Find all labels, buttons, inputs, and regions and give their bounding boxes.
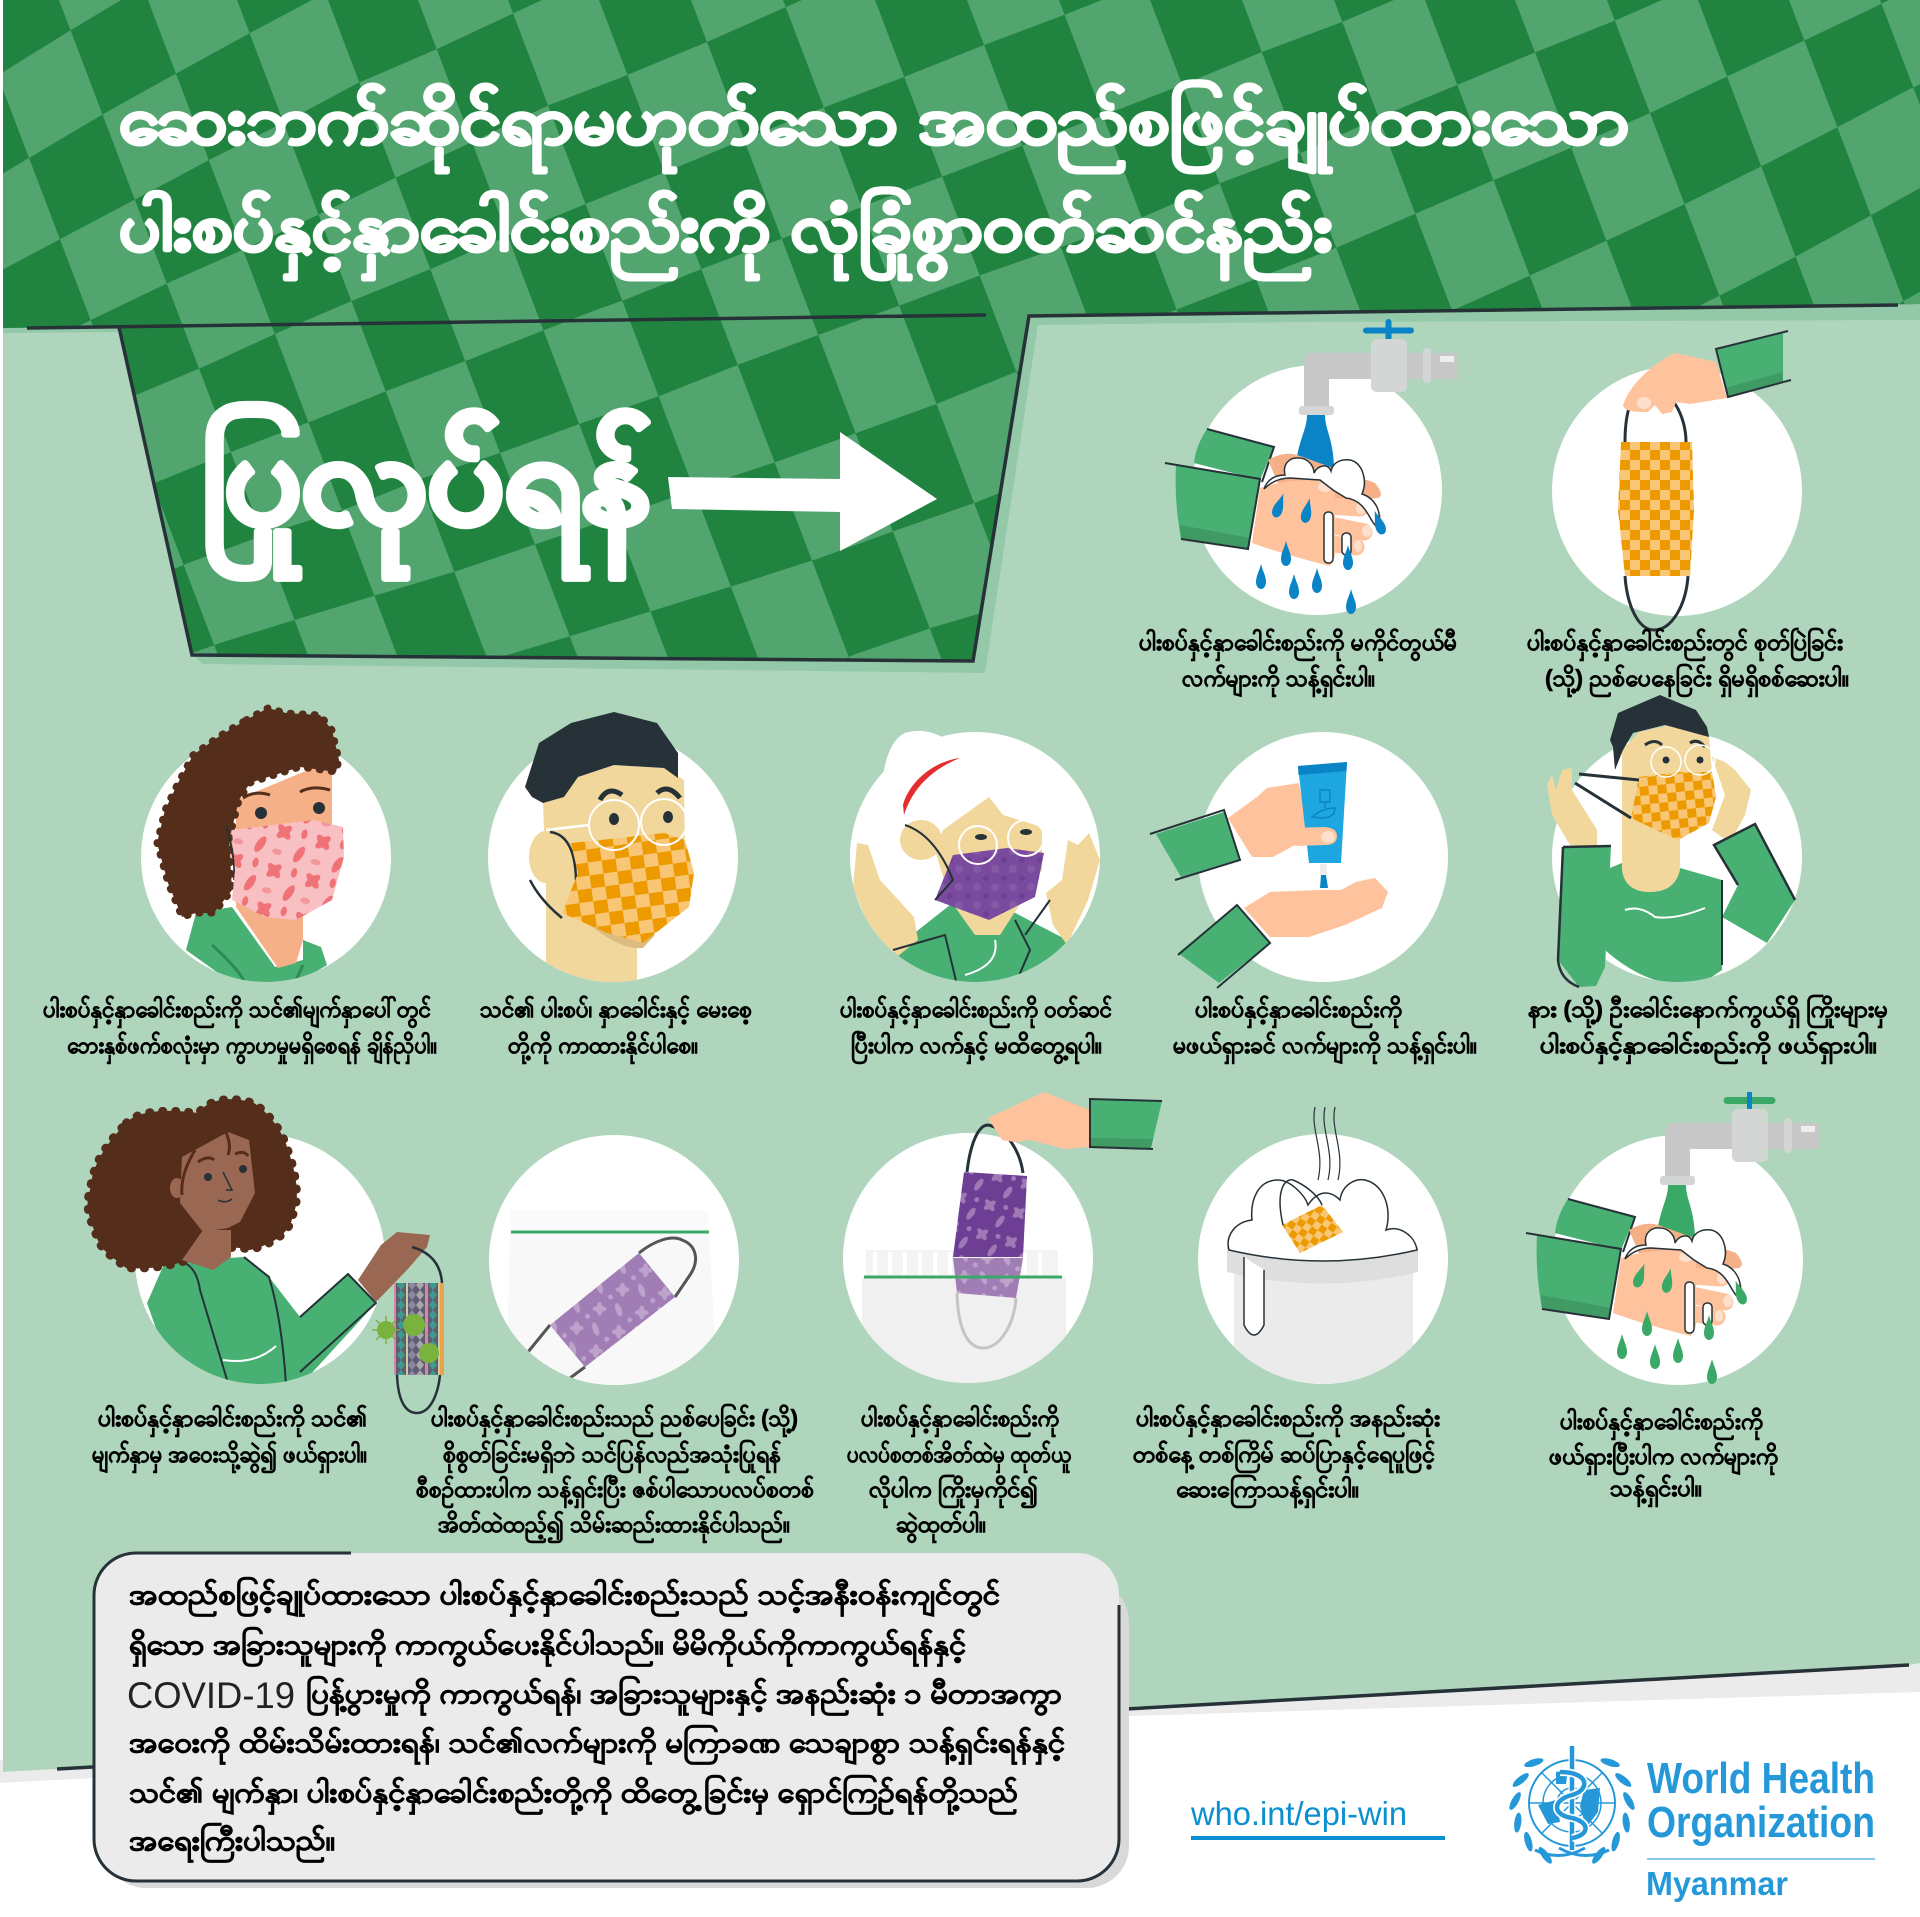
circle xyxy=(1553,1135,1803,1385)
sign heading: do's: ပြုလုပ်ရန် xyxy=(202,403,651,579)
illustration: woman with curly hair xyxy=(88,1099,430,1400)
circle xyxy=(141,732,391,982)
circle xyxy=(843,1133,1093,1383)
icon: viruses xyxy=(372,1314,439,1363)
caption: သန့်ရှင်းပါ။ xyxy=(1610,1475,1702,1507)
panel: wash mask xyxy=(1133,1107,1448,1508)
caption: အိတ်ထဲထည့်၍ သိမ်းဆည်းထားနိုင်ပါသည်။ xyxy=(438,1511,790,1543)
caption: လိုပါက ကြိုးမှကိုင်၍ xyxy=(869,1475,1038,1508)
icon: straps xyxy=(1625,387,1688,630)
caption: ပါးစပ်နှင့်နှာခေါင်းစည်းကို xyxy=(1195,996,1402,1028)
circle xyxy=(1552,732,1802,982)
header and sign outlines xyxy=(27,305,1898,661)
grey wedge below green panel xyxy=(0,1660,1920,1783)
icon: patterned mask xyxy=(394,1283,444,1375)
logo rule xyxy=(1647,1858,1875,1860)
wordmark: Organization xyxy=(1647,1798,1875,1847)
caption: ပလပ်စတစ်အိတ်ထဲမှ ထုတ်ယူ xyxy=(847,1441,1072,1473)
icon: sanitiser tube xyxy=(1298,762,1347,888)
icon: tap handle xyxy=(1727,1097,1772,1104)
caption: ပါးစပ်နှင့်နှာခေါင်းစည်းကို မကိုင်တွယ်မီ xyxy=(1139,629,1457,661)
callout text xyxy=(127,1576,1065,1864)
title xyxy=(119,78,1629,281)
icon: tap stem xyxy=(1747,1092,1752,1110)
bottom divider line xyxy=(57,1665,1909,1769)
caption: ပါးစပ်နှင့်နှာခေါင်းစည်းသည် ညစ်ပေခြင်း (သို့) xyxy=(431,1404,798,1437)
circle xyxy=(1552,366,1802,616)
caption xyxy=(1527,628,1849,697)
caption: စိုစွတ်ခြင်းမရှိဘဲ သင်ပြန်လည်အသုံးပြုရန် xyxy=(443,1440,781,1473)
caption xyxy=(480,996,752,1064)
callout text: သင်၏ မျက်နှာ၊ ပါးစပ်နှင့်နှာခေါင်းစည်းတို့ကို ထိတွေ့ခြင်းမှ ရှောင်ကြဉ်ရန်တို့သည် xyxy=(129,1774,1018,1816)
circle xyxy=(489,1135,739,1385)
box xyxy=(94,1553,1119,1881)
caption: ပါးစပ်နှင့်နှာခေါင်းစည်းကို အနည်းဆုံး xyxy=(1136,1405,1440,1437)
circle xyxy=(850,732,1100,982)
illustration: man xyxy=(525,712,694,990)
caption: စီစဉ်ထားပါက သန့်ရှင်းပြီး ဇစ်ပါသောပလပ်စတစ် xyxy=(416,1475,814,1508)
illustration: woman xyxy=(157,708,344,990)
panel: removing mask by straps xyxy=(1528,695,1888,1064)
caption xyxy=(1549,1408,1778,1507)
panel: take mask from bag xyxy=(843,1092,1162,1543)
illustration: older woman xyxy=(853,731,1100,1000)
icon: hands under running tap xyxy=(1526,1109,1819,1384)
panel: woman in pink mask xyxy=(43,708,437,1064)
callout text: အရေးကြီးပါသည်။ xyxy=(129,1822,335,1864)
circle xyxy=(135,1134,385,1384)
caption xyxy=(43,996,437,1064)
title: ပါးစပ်နှင့်နှာခေါင်းစည်းကို လုံခြုံစွာဝတ်ဆင်နည်း xyxy=(119,185,1332,281)
panel: wash hands after xyxy=(1526,1092,1819,1507)
callout text: COVID-19 xyxy=(127,1675,295,1716)
circle xyxy=(1198,1134,1448,1384)
wordmark: World Health xyxy=(1647,1754,1875,1803)
icon: checked mask xyxy=(1618,442,1694,576)
callout box xyxy=(94,1553,1129,1888)
zip line xyxy=(864,1276,1062,1278)
caption: (သို့) ညစ်ပေနေခြင်း ရှိမရှိစစ်ဆေးပါ။ xyxy=(1545,664,1849,697)
caption xyxy=(1133,1405,1440,1508)
illustration: foam xyxy=(1228,1180,1417,1261)
panel: man in checked mask xyxy=(480,712,752,1064)
illustration: bag xyxy=(862,1250,1066,1397)
icon: hands under running tap xyxy=(1165,339,1458,614)
WHO logo xyxy=(1507,1746,1875,1902)
caption: ဖယ်ရှားပြီးပါက လက်များကို xyxy=(1549,1442,1778,1475)
icon: sleeve xyxy=(1716,331,1791,397)
circle xyxy=(1192,365,1442,615)
callout text: ရှိသော အခြားသူများကို ကာကွယ်ပေးနိုင်ပါသည်။ မိမိကိုယ်ကိုကာကွယ်ရန်နှင့် xyxy=(129,1626,966,1668)
illustration: zip bag with mask xyxy=(508,1230,714,1385)
caption: တို့ကို ကာထားနိုင်ပါစေ။ xyxy=(508,1032,698,1064)
caption: ဘေးနှစ်ဖက်စလုံးမှာ ကွာဟမှုမရှိစေရန် ချိန်ညှိပါ။ xyxy=(67,1032,437,1064)
panel: pull mask away from face xyxy=(88,1099,444,1473)
caption: မဖယ်ရှားခင် လက်များကို သန့်ရှင်းပါ။ xyxy=(1173,1032,1477,1064)
caption: ပါးစပ်နှင့်နှာခေါင်းစည်းကို ဖယ်ရှားပါ။ xyxy=(1540,1032,1877,1064)
circle xyxy=(488,732,738,982)
icon: lower hand xyxy=(1244,878,1388,937)
caption: လက်များကို သန့်ရှင်းပါ။ xyxy=(1182,665,1375,697)
panel: mask stored in bag xyxy=(416,1135,814,1543)
caption xyxy=(1528,995,1888,1064)
caption: ပါးစပ်နှင့်နှာခေါင်းစည်းတွင် စုတ်ပြဲခြင်း xyxy=(1527,628,1843,661)
caption xyxy=(416,1404,814,1543)
caption: ပါးစပ်နှင့်နှာခေါင်းစည်းကို xyxy=(1560,1408,1763,1440)
mint background panel xyxy=(0,300,1920,1772)
illustration: basin xyxy=(1227,1247,1418,1395)
caption: ပါးစပ်နှင့်နှာခေါင်းစည်းကို သင်၏မျက်နှာပေါ်တွင် xyxy=(43,996,431,1028)
icon: thumbnail xyxy=(1321,831,1335,843)
icon: sleeve xyxy=(1090,1099,1162,1149)
icon: mask in foam xyxy=(1282,1205,1343,1253)
icon: hand holding strap xyxy=(1623,353,1727,414)
shadow xyxy=(104,1580,1129,1888)
checkered green header and sign shape xyxy=(3,0,1920,660)
title: ဆေးဘက်ဆိုင်ရာမဟုတ်သော အထည်စဖြင့်ချုပ်ထားသော xyxy=(119,78,1629,174)
caption xyxy=(847,1405,1072,1543)
wordmark xyxy=(1646,1754,1875,1902)
panel: hand sanitiser xyxy=(1150,732,1477,1064)
caption: ပါးစပ်နှင့်နှာခေါင်းစည်းကို xyxy=(861,1405,1059,1437)
icon: steam xyxy=(1314,1107,1340,1180)
illustration: man removing mask xyxy=(1547,695,1795,987)
icon: tap handle xyxy=(1366,322,1411,340)
caption xyxy=(1173,996,1477,1064)
caption: ပါးစပ်နှင့်နှာခေါင်းစည်းကို ဝတ်ဆင် xyxy=(840,996,1112,1028)
wordmark: Myanmar xyxy=(1646,1865,1788,1902)
arrow xyxy=(668,432,937,551)
panel: older woman xyxy=(840,731,1112,1064)
caption: သင်၏ ပါးစပ်၊ နှာခေါင်းနှင့် မေးစေ့ xyxy=(480,996,752,1028)
caption: တစ်နေ့ တစ်ကြိမ် ဆပ်ပြာနှင့်ရေပူဖြင့် xyxy=(1133,1440,1435,1473)
circle xyxy=(1198,732,1448,982)
caption: ပြီးပါက လက်နှင့် မထိတွေ့ရပါ။ xyxy=(851,1031,1102,1064)
icon: thumb xyxy=(1290,827,1337,846)
link: who.int/epi-win: who.int/epi-win xyxy=(1190,1795,1407,1832)
emblem xyxy=(1507,1746,1637,1865)
caption: ဆွဲထုတ်ပါ။ xyxy=(896,1511,986,1543)
caption: နား (သို့) ဦးခေါင်းနောက်ကွယ်ရှိ ကြိုးများမှ xyxy=(1528,995,1888,1028)
panel: inspect mask xyxy=(1527,331,1849,697)
icon: strap xyxy=(397,1247,442,1413)
icon: hand xyxy=(988,1092,1090,1149)
panel shadow bands xyxy=(3,326,130,333)
caption: ပါးစပ်နှင့်နှာခေါင်းစည်းကို သင်၏ xyxy=(98,1405,367,1437)
caption xyxy=(1139,629,1457,697)
caption xyxy=(840,996,1112,1064)
icon: upper hand xyxy=(1228,783,1310,857)
outline xyxy=(94,1553,1119,1881)
callout text: ပြန့်ပွားမှုကို ကာကွယ်ရန်၊ အခြားသူများနှင့် အနည်းဆုံး ၁ မီတာအကွာ xyxy=(306,1675,1062,1717)
panel: wash hands before touching xyxy=(1139,322,1458,697)
callout text: အထည်စဖြင့်ချုပ်ထားသော ပါးစပ်နှင့်နှာခေါင်းစည်းသည် သင့်အနီးဝန်းကျင်တွင် xyxy=(129,1576,1000,1618)
caption xyxy=(92,1405,367,1473)
callout text: အဝေးကို ထိမ်းသိမ်းထားရန်၊ သင်၏လက်များကို မကြာခဏ သေချာစွာ သန့်ရှင်းရန်နှင့် xyxy=(129,1724,1065,1766)
icon: soap drip xyxy=(1244,1257,1264,1335)
icon: mask straps xyxy=(1280,1180,1322,1225)
caption: မျက်နှာမှ အဝေးသို့ဆွဲ၍ ဖယ်ရှားပါ။ xyxy=(92,1441,367,1473)
icon: sleeves xyxy=(1150,810,1270,988)
icon: mask held by strap xyxy=(953,1172,1027,1257)
caption: ဆေးကြောသန့်ရှင်းပါ။ xyxy=(1176,1475,1359,1508)
